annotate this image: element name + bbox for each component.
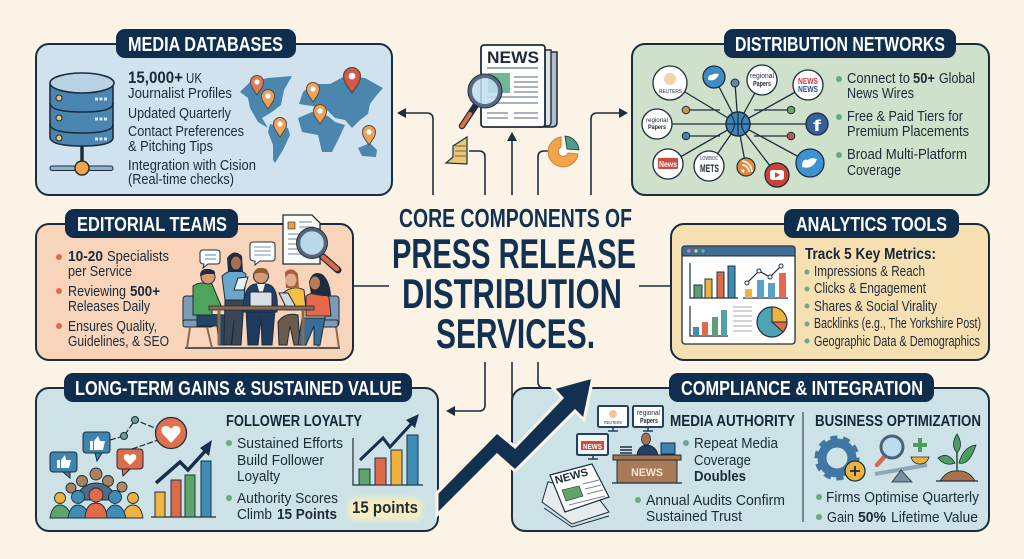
illustration: news desk and monitors: NEWS (554, 467, 590, 487)
follower loyalty text: Climb (237, 506, 272, 523)
business optimization text: BUSINESS OPTIMIZATION (815, 413, 981, 430)
business optimization text: Gain (827, 509, 854, 526)
bullet list: network reach: 50+ (913, 70, 935, 87)
heading: media databases (116, 29, 296, 58)
text: database facts: 15,000+ (128, 68, 183, 87)
business optimization text: Firms Optimise Quarterly (826, 489, 979, 506)
icon: donut chart (548, 136, 579, 167)
follower loyalty text: Build Follower (237, 452, 324, 469)
text: database facts: UK (186, 70, 202, 87)
heading: analytics tools: ANALYTICS TOOLS (796, 214, 947, 236)
icon: newspaper with magnifier (462, 45, 557, 127)
title: DISTRIBUTION (402, 270, 622, 317)
heading: editorial teams (65, 209, 238, 238)
network diagram: Papers (648, 124, 666, 131)
bullet list: editorial facts: 500+ (130, 283, 160, 300)
heading: distribution networks (724, 29, 956, 58)
connector lines and arrows (353, 108, 670, 433)
network diagram: regional (750, 73, 774, 80)
network diagram (642, 65, 828, 187)
follower loyalty text: Authority Scores (237, 490, 338, 507)
title: SERVICES. (436, 310, 595, 357)
heading: long-term gains (64, 373, 412, 402)
bullet list: editorial facts: Ensures Quality, (68, 318, 157, 335)
bullet list: editorial facts: per Service (68, 263, 132, 280)
icon: newspaper with magnifier: NEWS (487, 48, 539, 67)
bullet list: network reach: Broad Multi-Platform (847, 146, 967, 163)
panel: distribution networks (632, 29, 989, 195)
network diagram: regional (646, 117, 669, 124)
business optimization text: 50% (858, 509, 886, 526)
bullet list: editorial facts: 10-20 (68, 248, 103, 265)
text: database facts: & Pitching Tips (128, 138, 213, 155)
text: database facts: Updated Quarterly (128, 105, 231, 122)
mini bar chart (353, 414, 423, 485)
media authority text: Annual Audits Confirm (646, 492, 785, 509)
text: database facts (128, 68, 256, 188)
media authority text (635, 413, 795, 525)
bullet list: editorial facts: Guidelines, & SEO (68, 333, 169, 350)
follower loyalty text: FOLLOWER LOYALTY (226, 413, 362, 430)
metrics list: Impressions & Reach (814, 263, 925, 280)
metrics list: Track 5 Key Metrics: (805, 246, 936, 263)
illustration: news desk and monitors (542, 406, 682, 527)
network diagram: NEWS (798, 77, 819, 86)
illustration: engaged audience (50, 416, 186, 518)
bar chart with rising arrow (151, 440, 216, 517)
media authority text: Coverage (694, 452, 751, 469)
panel: compliance and integration (512, 373, 989, 531)
heading: long-term gains: LONG-TERM GAINS & SUSTAINED VALUE (75, 378, 402, 400)
bullet list: network reach: Connect to (847, 70, 910, 87)
icon: document stack (446, 137, 467, 164)
heading: compliance and integration (669, 373, 934, 402)
text: database facts: (Real-time checks) (128, 171, 234, 188)
callout: 15 points: 15 points (352, 498, 418, 517)
network diagram: METS (700, 163, 719, 175)
bullet list: editorial facts: Releases Daily (68, 298, 150, 315)
illustration: news desk and monitors: NEWS (631, 467, 663, 479)
illustration: news desk and monitors: regional (637, 410, 660, 417)
follower loyalty text: 15 Points (277, 506, 337, 523)
bullet list: network reach (836, 70, 975, 179)
icon: gear with plus (817, 438, 865, 481)
text: database facts: Integration with Cision (128, 157, 256, 174)
metrics list: Clicks & Engagement (814, 280, 927, 297)
bullet list: network reach: Coverage (847, 162, 901, 179)
follower loyalty text: Sustained Efforts (237, 435, 343, 452)
heading: media databases: MEDIA DATABASES (128, 34, 283, 56)
bullet list: network reach: Premium Placements (847, 123, 969, 140)
heading: analytics tools (784, 209, 959, 238)
metrics list (804, 246, 981, 350)
panel: analytics tools (671, 209, 989, 360)
follower loyalty text: Loyalty (237, 468, 280, 485)
business optimization text: Lifetime Value (891, 509, 978, 526)
panel: editorial teams (36, 209, 353, 360)
media authority text: Doubles (694, 468, 746, 485)
illustration: news desk and monitors: Papers (640, 418, 658, 425)
illustration: news desk and monitors: REUTERS (604, 420, 622, 425)
bullet list: network reach: Free & Paid Tiers for (847, 108, 963, 125)
icon: magnifier and balance scale (875, 436, 929, 482)
heading: compliance and integration: COMPLIANCE & INTEGRATION (681, 378, 923, 400)
icon: growing plant (936, 434, 978, 481)
heading: editorial teams: EDITORIAL TEAMS (77, 214, 227, 236)
panel: media databases (36, 29, 392, 195)
icon: database server (50, 73, 114, 175)
bullet list: editorial facts: Specialists (107, 248, 169, 265)
world map with location pins (240, 68, 383, 163)
media authority text: Sustained Trust (646, 508, 743, 525)
text: database facts: Journalist Profiles (128, 85, 232, 102)
bullet list: network reach: Global (939, 70, 975, 87)
icon: document with magnifier (283, 215, 338, 270)
title: CORE COMPONENTS OF (399, 203, 632, 233)
media authority text: Repeat Media (694, 435, 779, 452)
title: PRESS RELEASE (392, 230, 636, 277)
title (392, 203, 636, 357)
metrics list: Shares & Social Virality (814, 298, 937, 315)
big rising arrow (437, 377, 593, 515)
network diagram: REUTERS (659, 89, 682, 95)
bullet list: network reach: News Wires (847, 85, 914, 102)
dashboard window with charts (682, 246, 795, 344)
bullet list: editorial facts (56, 248, 169, 350)
network diagram: LOWBOC (700, 156, 718, 162)
heading: distribution networks: DISTRIBUTION NETWORKS (735, 34, 945, 56)
business optimization text (815, 413, 981, 526)
follower loyalty text (226, 413, 362, 523)
bullet list: editorial facts: Reviewing (68, 283, 126, 300)
network diagram: Papers (753, 81, 771, 88)
panel: long-term gains and sustained value (36, 373, 438, 531)
illustration: team at a table (183, 242, 340, 348)
network diagram: f (813, 118, 822, 135)
network diagram: News (659, 160, 677, 169)
media authority text: MEDIA AUTHORITY (670, 413, 795, 430)
text: database facts: Contact Preferences (128, 123, 244, 140)
illustration: news desk and monitors: NEWS (583, 442, 602, 451)
network diagram: NEWS (798, 85, 819, 94)
